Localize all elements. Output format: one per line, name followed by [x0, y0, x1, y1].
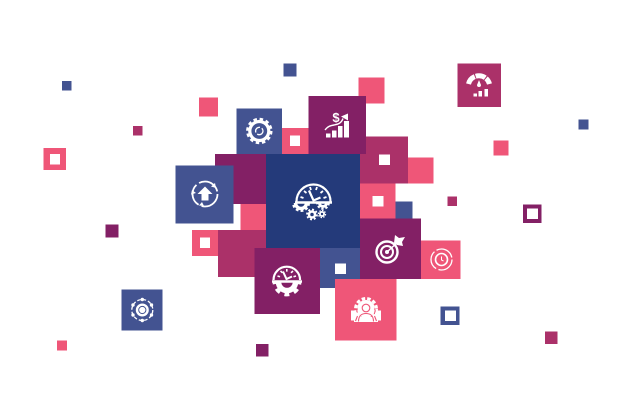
- panel: pink square with team and gear icon: [335, 279, 396, 340]
- panel: purple square with dollar growth chart icon: $: [332, 110, 340, 125]
- panel: pink square with white hole, right: [360, 184, 396, 219]
- panel: pink square beside centre: [240, 204, 266, 230]
- panel: magenta square with gauge icon: [458, 64, 501, 107]
- infographic canvas: [44, 64, 588, 356]
- panel: blue square with radial dots icon: [122, 290, 162, 330]
- panel: pink square top right: [358, 78, 384, 104]
- panel: pink square right: [408, 158, 434, 184]
- panel: central navy square with gauge and gears icon: [266, 154, 360, 248]
- panel: purple square with dollar growth chart icon: [308, 96, 366, 154]
- scattered squares: top and bottom: [199, 64, 296, 356]
- panel: blue square with gear icon: [236, 108, 282, 154]
- panel: pink square with white hole, left: [192, 230, 218, 256]
- panel: pink square with white hole, top: [282, 128, 309, 154]
- panel: magenta square with white hole: [360, 136, 408, 184]
- panel: blue square with white hole: [320, 248, 360, 288]
- panel: back purple square: [215, 154, 266, 204]
- panel: blue square with circular upload arrow icon: [176, 166, 234, 224]
- panel: magenta square lower left: [218, 230, 266, 277]
- scattered squares: left: [44, 81, 142, 350]
- panel: purple square with clock and gear icon: [254, 248, 320, 314]
- panel: pink square with circular clock icon: [421, 240, 460, 279]
- panel: purple square with target and arrow icon: [360, 218, 421, 279]
- scattered squares: right: [440, 120, 588, 344]
- panel: small blue square: [396, 202, 412, 219]
